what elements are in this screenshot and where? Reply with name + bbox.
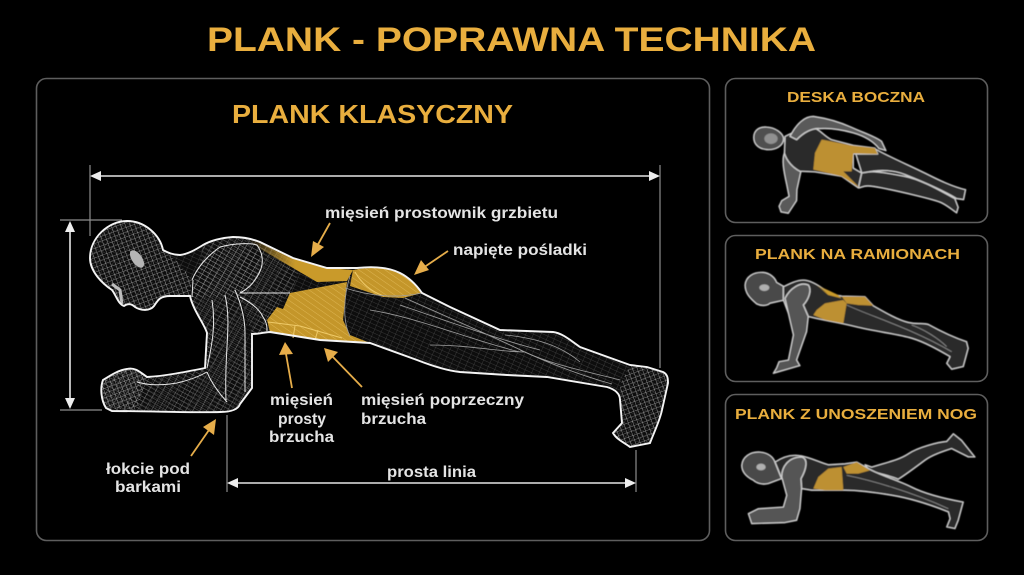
label: elbows under shoulders: barkami bbox=[115, 479, 181, 496]
leg contours bbox=[847, 475, 948, 509]
leg contours bbox=[847, 305, 952, 352]
label: straight line: prosta linia bbox=[387, 464, 476, 481]
figure: high plank bbox=[745, 272, 968, 373]
thigh and leg contours bbox=[345, 276, 620, 384]
upper leg bbox=[853, 146, 966, 200]
nose highlight bbox=[112, 284, 122, 304]
muscle: glute bbox=[843, 462, 870, 474]
arrow: transverse abdominis bbox=[324, 348, 362, 387]
label: transverse abdominis: brzucha bbox=[361, 411, 426, 428]
label: rectus abdominis: brzucha bbox=[269, 429, 334, 446]
muscle: erector spinae bbox=[248, 240, 353, 282]
callout arrows bbox=[191, 223, 448, 456]
dimension: straight line arrow bbox=[227, 415, 636, 492]
ear highlight bbox=[756, 464, 766, 470]
arrow: elbows bbox=[191, 419, 216, 456]
label: elbows under shoulders bbox=[106, 461, 190, 496]
ear highlight bbox=[127, 248, 147, 270]
muscle: glutes bbox=[350, 268, 422, 298]
arm and torso contours bbox=[137, 244, 290, 402]
muscle: back bbox=[815, 284, 842, 298]
label: transverse abdominis bbox=[361, 392, 524, 428]
arrow: rectus abdominis bbox=[279, 342, 293, 388]
panel: plank klasyczny bbox=[36, 78, 710, 540]
panel: plank z unoszeniem nog bbox=[726, 394, 988, 540]
figure: classic plank body bbox=[90, 221, 668, 447]
muscle: abs bbox=[813, 467, 843, 490]
torso mesh bbox=[192, 237, 300, 334]
lower leg bbox=[857, 172, 958, 213]
muscle: abdominals bbox=[267, 282, 370, 343]
label: rectus abdominis bbox=[269, 392, 334, 446]
ear highlight bbox=[759, 284, 769, 291]
label: rectus abdominis: mięsień bbox=[270, 392, 333, 409]
arm mesh bbox=[101, 243, 260, 412]
heading: plank na ramionach: PLANK NA RAMIONACH bbox=[755, 246, 960, 263]
heading: deska boczna: DESKA BOCZNA bbox=[787, 89, 925, 106]
dimension: body height arrow bbox=[60, 220, 122, 410]
panel: plank na ramionach bbox=[726, 236, 988, 382]
dimension: total length arrow bbox=[90, 165, 660, 368]
heading: plank z unoszeniem nog: PLANK Z UNOSZENIEM NOG bbox=[735, 406, 977, 423]
label: glutes: napięte pośladki bbox=[453, 242, 587, 259]
head mesh bbox=[90, 221, 192, 310]
upper arm bbox=[790, 116, 886, 151]
figure: leg raise plank bbox=[742, 434, 975, 529]
arm bbox=[773, 284, 810, 373]
muscle: abs bbox=[813, 300, 847, 323]
label: transverse abdominis: mięsień poprzeczny bbox=[361, 392, 524, 409]
torso bbox=[784, 128, 878, 188]
title: PLANK - POPRAWNA TECHNIKA bbox=[207, 21, 816, 59]
head bbox=[745, 272, 785, 306]
torso and legs bbox=[783, 280, 968, 369]
muscle: glute bbox=[842, 296, 873, 306]
head bbox=[742, 452, 782, 484]
raised leg bbox=[865, 434, 975, 479]
face highlight bbox=[764, 133, 778, 144]
label: rectus abdominis: prosty bbox=[278, 411, 326, 428]
label: erector spinae: mięsień prostownik grzbietu bbox=[325, 205, 558, 222]
label: elbows under shoulders: łokcie pod bbox=[106, 461, 190, 478]
figure: side plank bbox=[754, 116, 966, 213]
heading: plank klasyczny: PLANK KLASYCZNY bbox=[232, 99, 513, 129]
foot mesh bbox=[613, 365, 668, 447]
body outline bbox=[90, 221, 668, 447]
arrow: erector spinae bbox=[311, 223, 330, 257]
arrow: glutes bbox=[414, 251, 448, 275]
torso and lower leg bbox=[775, 455, 963, 529]
panel: deska boczna bbox=[726, 78, 988, 222]
arm bbox=[748, 457, 806, 524]
muscles: core bbox=[813, 140, 878, 188]
support arm bbox=[779, 153, 801, 213]
fist mesh bbox=[101, 369, 147, 410]
head bbox=[754, 127, 784, 150]
